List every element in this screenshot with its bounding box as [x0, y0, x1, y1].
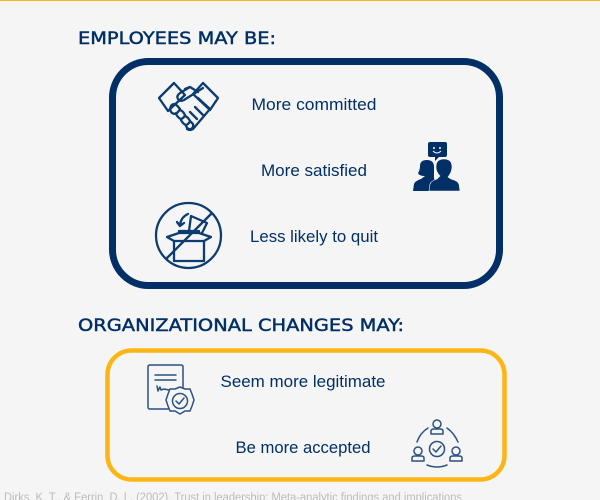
panel: employee outcomes	[112, 62, 500, 286]
icon: certificate with seal	[148, 365, 194, 414]
heading: organizational changes may: ORGANIZATIONAL CHANGES MAY:	[78, 316, 404, 336]
label: seem more legitimate: Seem more legitimate	[220, 373, 386, 391]
icon: handshake	[159, 83, 218, 130]
icon: no quitting box	[156, 203, 221, 268]
label: less likely to quit: Less likely to quit	[250, 228, 378, 246]
icon: people around a check mark	[412, 420, 462, 467]
label: more committed: More committed	[252, 96, 376, 114]
panel: organizational outcomes	[108, 350, 504, 480]
label: more satisfied: More satisfied	[261, 162, 367, 180]
icon: two people with smiley speech bubble	[413, 142, 460, 191]
heading: employees may be: EMPLOYEES MAY BE:	[78, 29, 276, 49]
label: be more accepted: Be more accepted	[236, 439, 370, 457]
